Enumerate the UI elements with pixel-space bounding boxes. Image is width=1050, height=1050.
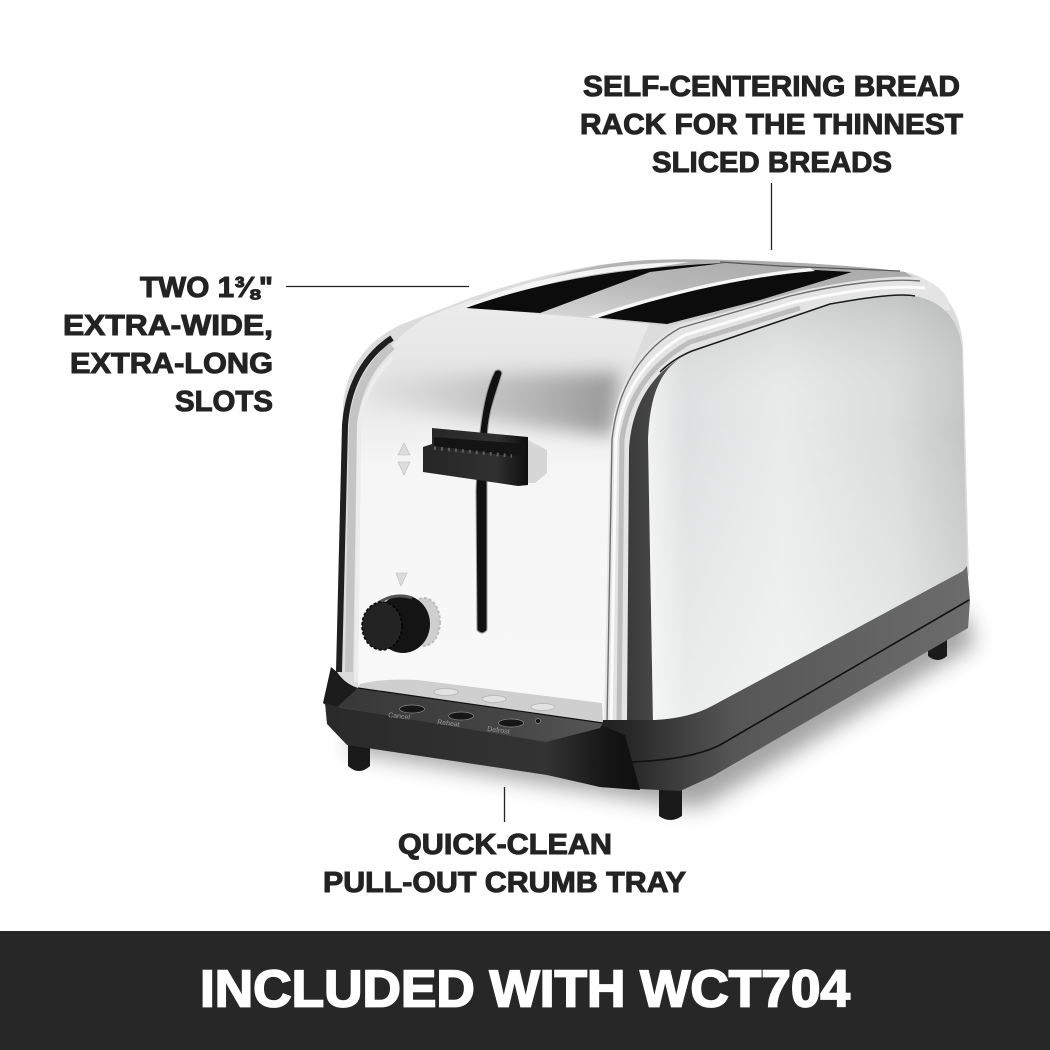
bread slot 1	[466, 263, 725, 313]
left chrome edge	[339, 338, 392, 682]
side panel	[648, 295, 967, 722]
dark rim reflection	[627, 354, 690, 724]
top surface	[470, 259, 925, 326]
button labels: Defrost	[487, 726, 510, 736]
leader line: slots	[286, 286, 469, 288]
base	[323, 566, 970, 791]
lever handle	[423, 428, 528, 486]
button labels	[388, 712, 510, 736]
lever ghost reflection	[528, 440, 547, 483]
base side band	[540, 566, 970, 791]
front face reflection band	[362, 372, 620, 436]
front face	[358, 300, 660, 726]
callout: bread rack: SELF-CENTERING BREAD	[583, 71, 960, 103]
reflection above panel	[358, 680, 603, 723]
buttons	[400, 705, 540, 727]
top left chrome lip	[463, 262, 690, 308]
callout: slots: EXTRA-WIDE,	[63, 310, 273, 342]
callout: crumb tray: QUICK-CLEAN	[398, 829, 612, 861]
rubber feet	[348, 630, 947, 820]
panel edge	[358, 688, 603, 723]
callout: slots: SLOTS	[175, 386, 273, 418]
callout: slots	[63, 272, 273, 418]
callout: bread rack: RACK FOR THE THINNEST	[580, 109, 964, 141]
control panel	[337, 688, 603, 742]
footer banner	[0, 931, 1050, 1050]
callout: crumb tray: PULL-OUT CRUMB TRAY	[323, 867, 686, 899]
banner title: INCLUDED WITH WCT704	[200, 960, 850, 1018]
slot 2 highlight	[588, 268, 815, 318]
panel reflections	[434, 688, 555, 710]
toaster photo illustration	[323, 259, 975, 820]
callout: slots: TWO 1⅜"	[140, 272, 273, 304]
lever slot	[476, 370, 502, 633]
leader line: bread rack	[770, 183, 772, 250]
callout: crumb tray	[323, 829, 686, 899]
callout: slots: EXTRA-LONG	[70, 348, 273, 380]
button labels: Reheat	[437, 719, 460, 729]
callout: bread rack: SLICED BREADS	[652, 147, 892, 179]
floor shadow	[350, 610, 975, 808]
back top edge line	[720, 262, 900, 271]
indicator arrows	[396, 443, 410, 586]
base front lip	[325, 703, 640, 790]
browning dial	[362, 595, 440, 653]
chrome rim band	[604, 277, 950, 726]
callout: bread rack	[580, 71, 964, 179]
rim lines	[607, 280, 925, 724]
leader line: crumb tray	[504, 787, 506, 822]
base left corner	[323, 667, 358, 712]
button labels: Cancel	[388, 712, 411, 722]
chrome body silhouette	[336, 259, 969, 725]
slot 2	[592, 270, 852, 324]
